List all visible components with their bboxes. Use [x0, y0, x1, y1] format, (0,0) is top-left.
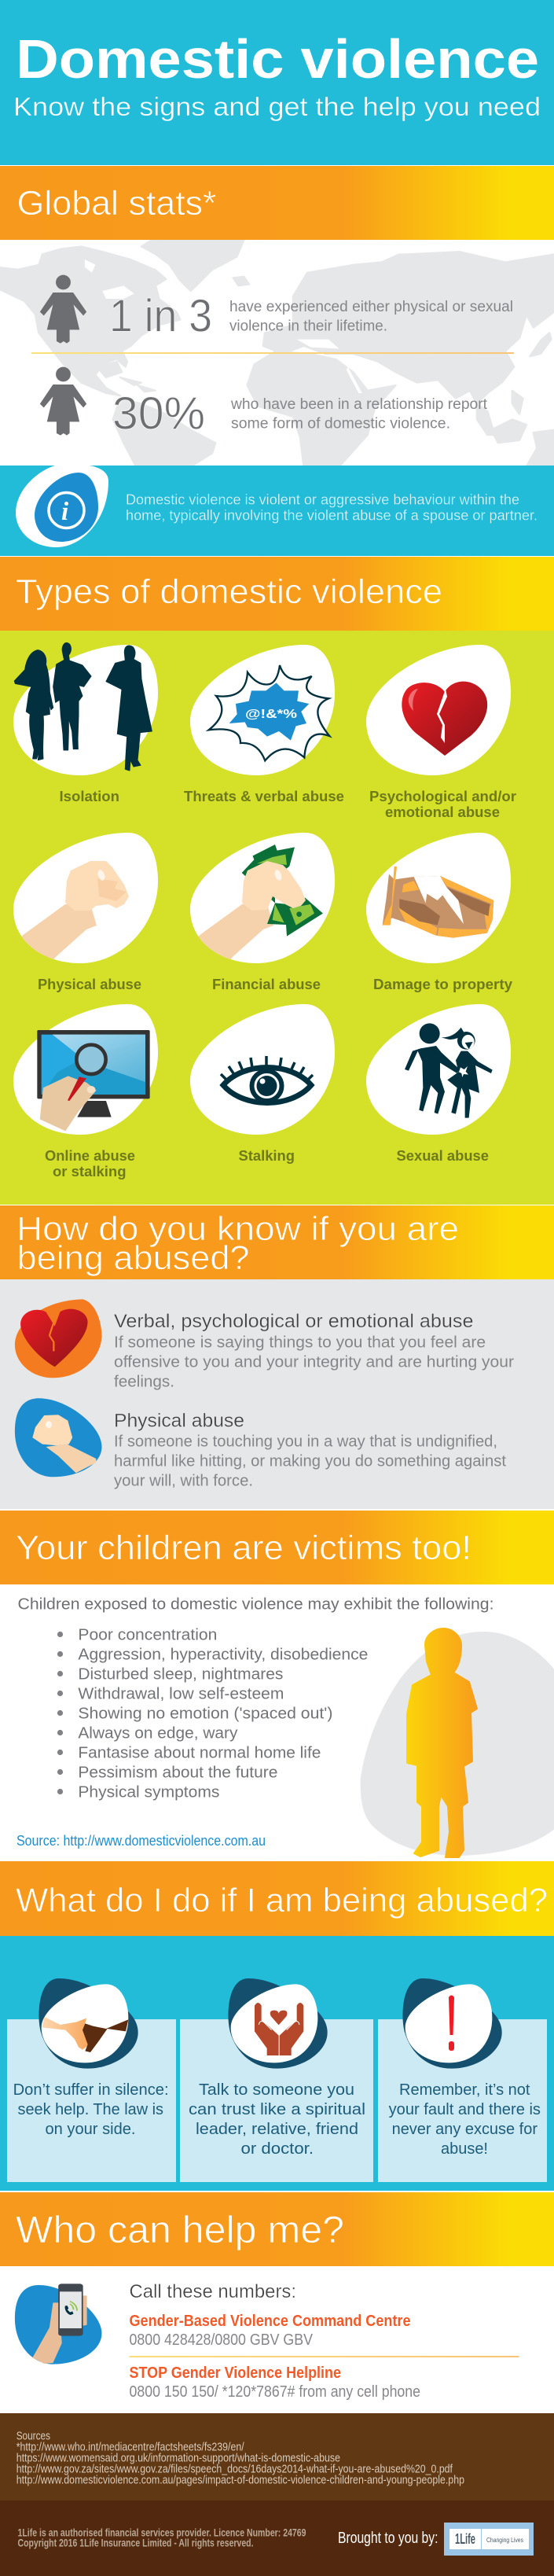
list: symptoms: Disturbed sleep, nightmares [78, 1665, 283, 1683]
text: don't suffer: Don’t suffer in silence: [13, 2081, 169, 2099]
illustration: child silhouette [361, 1628, 554, 1857]
heading: who can help me [0, 2192, 554, 2266]
text: stop helpline: 0800 150 150/ *120*7867# from any cell phone [129, 2383, 420, 2401]
text: second stat description [230, 396, 488, 432]
panel: sources: Sources [17, 2431, 50, 2443]
text: physical abuse: your will, with force. [114, 1472, 253, 1489]
text: physical abuse: harmful like hitting, or making you do something against [114, 1452, 506, 1470]
text: stop helpline [129, 2364, 420, 2401]
text: stop helpline: STOP Gender Violence Helpline [129, 2364, 341, 2382]
item: financial abuse [185, 833, 335, 992]
item: online abuse or stalking: Online abuse [45, 1148, 135, 1164]
text: don't suffer: seek help. The law is [17, 2101, 163, 2118]
text: legal [17, 2526, 306, 2549]
heading: what do I do: What do I do if I am being abused? [16, 1882, 548, 1919]
panel: definition band [0, 464, 554, 556]
list: symptoms: Physical symptoms [78, 1783, 219, 1801]
text: source: Source: http://www.domesticviolence.com.au [17, 1833, 266, 1849]
text: command centre: Gender-Based Violence Command Centre [129, 2313, 410, 2330]
text: don't suffer: on your side. [46, 2121, 135, 2138]
heading: children [0, 1511, 554, 1584]
text: not your fault: your fault and there is [389, 2101, 541, 2118]
icon: exclamation [402, 1978, 502, 2069]
panel: sources: http://www.gov.za/sites/www.gov.za/files/speech_docs/16days2014-what-if-you-are-abused%20_0.pdf [17, 2464, 453, 2476]
heading: how do you know: How do you know if you are [17, 1211, 459, 1248]
text: first stat description: have experienced either physical or sexual [229, 299, 513, 315]
item: financial abuse: Financial abuse [212, 977, 321, 992]
list: symptoms: Withdrawal, low self-esteem [78, 1686, 284, 1703]
subtitle: Know the signs and get the help you need [13, 92, 541, 121]
heading: types of domestic violence: Types of domestic violence [16, 572, 442, 611]
list: symptoms: Aggression, hyperactivity, disobedience [78, 1647, 368, 1664]
text: brought to you by: Brought to you by: [338, 2530, 438, 2547]
item: psychological and emotional abuse: Psychological and/or [369, 789, 516, 804]
panel: footer [0, 2501, 554, 2576]
heading: children: Your children are victims too! [16, 1529, 471, 1567]
text: not your fault: never any excuse for [392, 2121, 537, 2138]
text: physical abuse [114, 1411, 506, 1489]
item: threats and verbal abuse: @!&*% [245, 708, 297, 721]
list: symptoms [57, 1626, 368, 1801]
card: don't suffer in silence [7, 1978, 176, 2182]
text: verbal abuse: If someone is saying things to you that you feel are [114, 1334, 486, 1351]
icon: caring hands [228, 1978, 328, 2069]
panel: sources: *http://www.who.int/mediacentre/factsheets/fs239/en/ [17, 2442, 245, 2454]
text: first stat description [229, 299, 513, 335]
text: children intro: Children exposed to domestic violence may exhibit the following: [17, 1596, 493, 1614]
text: not your fault [389, 2081, 541, 2158]
item: physical abuse [8, 833, 158, 992]
item: online abuse or stalking [13, 1004, 158, 1179]
icon: woman 1 [40, 275, 86, 344]
item: stalking: Stalking [239, 1148, 295, 1164]
text: definition: home, typically involving the violent abuse of a spouse or partner. [126, 508, 537, 524]
item: sexual abuse: Sexual abuse [396, 1148, 489, 1164]
item: threats and verbal abuse: Threats & verbal abuse [184, 789, 344, 804]
text: talk to someone: can trust like a spiritual [189, 2101, 365, 2118]
text: verbal abuse: offensive to you and your integrity and are hurting your [114, 1353, 514, 1371]
item: sexual abuse [366, 1004, 511, 1164]
panel: sources [0, 2413, 554, 2501]
panel: header [0, 0, 554, 165]
list: symptoms: Always on edge, wary [78, 1725, 237, 1742]
text: talk to someone: or doctor. [240, 2140, 314, 2158]
text: talk to someone [189, 2081, 365, 2158]
text: first stat description: violence in their lifetime. [229, 318, 387, 335]
text: definition [126, 492, 537, 524]
panel: global stats [0, 240, 554, 466]
list: symptoms: Showing no emotion ('spaced out') [78, 1705, 332, 1722]
text: not your fault: abuse! [441, 2140, 488, 2158]
heading: what do I do [0, 1861, 554, 1936]
list: symptoms: Poor concentration [78, 1626, 217, 1643]
panel: what to do [0, 1936, 554, 2191]
world map background [0, 240, 554, 466]
logo: 1Life: Changing Lives [486, 2537, 523, 2544]
icon: handshake [39, 1978, 138, 2069]
icon: info: i [61, 498, 69, 526]
text: second stat description: some form of domestic violence. [231, 415, 450, 432]
panel: types grid [0, 631, 554, 1205]
heading: global stats: Global stats* [17, 184, 217, 223]
item: stalking [190, 1004, 335, 1164]
icon: info [16, 464, 108, 547]
text: physical abuse: Physical abuse [114, 1411, 244, 1432]
text: command centre [129, 2313, 410, 2349]
item: psychological and emotional abuse [366, 645, 516, 820]
panel: signs of abuse [0, 1279, 554, 1509]
card: talk to someone [180, 1978, 373, 2182]
item: damage to property [366, 833, 512, 992]
panel: sources: https://www.womensaid.org.uk/information-support/what-is-domestic-abuse [17, 2453, 340, 2465]
text: second stat description: who have been in a relationship report [230, 396, 488, 413]
heading: how do you know: being abused? [17, 1240, 250, 1277]
text: not your fault: Remember, it’s not [399, 2081, 530, 2099]
list: symptoms: Pessimism about the future [78, 1765, 277, 1782]
text: talk to someone: Talk to someone you [199, 2081, 354, 2099]
text: definition: Domestic violence is violent or aggressive behaviour within the [126, 492, 519, 508]
stat: 1 in 3: 1 in 3 [109, 291, 212, 341]
title: Domestic violence [16, 28, 539, 90]
panel: children [17, 1596, 554, 1857]
item: psychological and emotional abuse: emotional abuse [385, 804, 500, 820]
heading: who can help me: Who can help me? [16, 2210, 344, 2251]
logo: 1Life: 1Life [455, 2531, 475, 2547]
text: verbal abuse: feelings. [114, 1373, 174, 1390]
heading: how do you know [0, 1205, 554, 1280]
item: isolation [13, 642, 158, 804]
text: talk to someone: leader, relative, friend [196, 2121, 358, 2138]
text: legal: 1Life is an authorised financial services provider. Licence Number: 24769 [17, 2526, 306, 2538]
icon: phone in hand [15, 2283, 101, 2364]
panel: sources: http://www.domesticviolence.com.au/pages/impact-of-domestic-violence-children-and-young-people.php [17, 2475, 464, 2487]
logo: 1Life [444, 2523, 534, 2556]
text: legal: Copyright 2016 1Life Insurance Limited - All rights reserved. [17, 2537, 253, 2549]
item: threats and verbal abuse [184, 645, 344, 804]
item: isolation: Isolation [60, 789, 119, 804]
heading: types of domestic violence [0, 557, 554, 631]
text: physical abuse: If someone is touching you in a way that is undignified, [114, 1433, 497, 1450]
text: verbal abuse [114, 1311, 514, 1390]
item: physical abuse: Physical abuse [38, 977, 141, 992]
icon: woman 2 [40, 367, 86, 436]
text: don't suffer [13, 2081, 169, 2138]
icon: fist [15, 1398, 101, 1477]
text: command centre: 0800 428428/0800 GBV GBV [129, 2331, 314, 2349]
text: call these numbers: Call these numbers: [129, 2281, 296, 2302]
icon: broken heart [15, 1299, 101, 1378]
list: symptoms: Fantasise about normal home life [78, 1744, 321, 1761]
card: not your fault [378, 1978, 547, 2182]
text: verbal abuse: Verbal, psychological or emotional abuse [114, 1311, 473, 1332]
item: online abuse or stalking: or stalking [53, 1164, 126, 1179]
item: damage to property: Damage to property [373, 977, 512, 992]
heading: global stats [0, 166, 554, 240]
panel: helplines [0, 2266, 554, 2413]
stat: 30%: 30% [112, 388, 205, 439]
